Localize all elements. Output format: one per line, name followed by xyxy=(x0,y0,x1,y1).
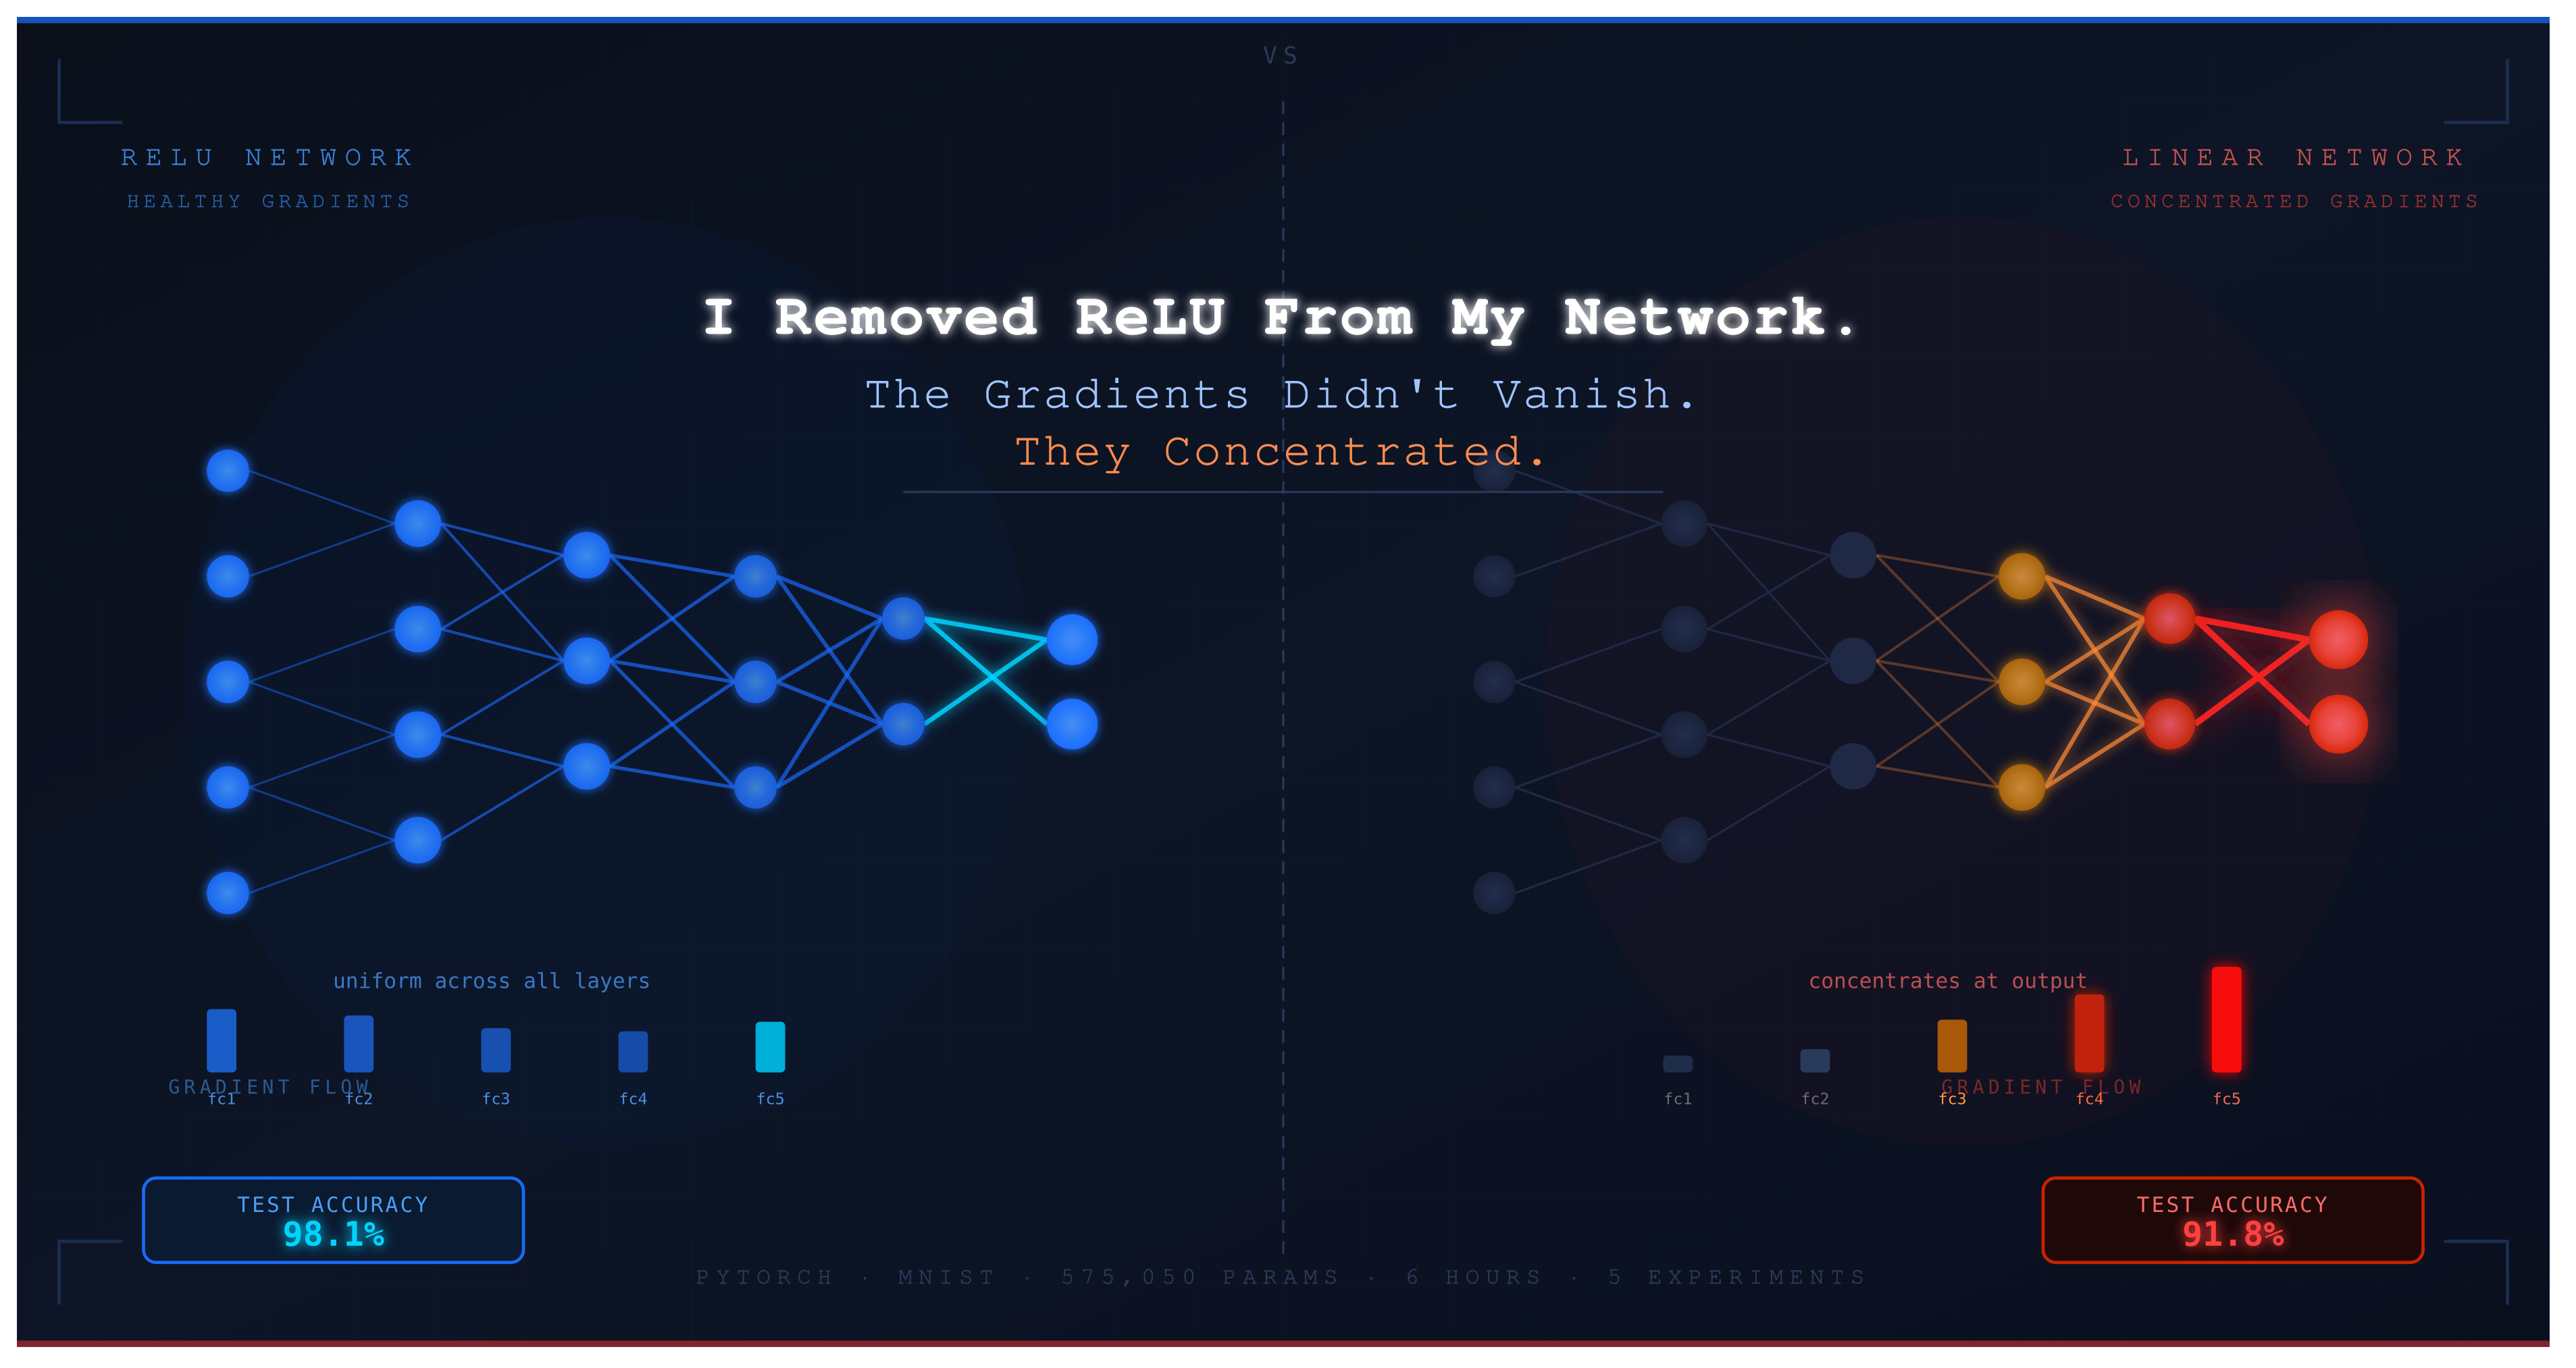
subtitle line 2: They Concentrated. xyxy=(1014,427,1553,474)
bar labels xyxy=(1664,1089,2241,1108)
panel: Linear network diagram xyxy=(1473,450,2368,914)
left background ellipse xyxy=(186,218,1030,1146)
title divider xyxy=(904,491,1663,492)
nodes: layer 3 xyxy=(563,532,610,790)
section label: GRADIENT FLOW xyxy=(1941,1076,2145,1098)
edges: layer 2 to 3 dim xyxy=(1707,524,1830,840)
nodes: layer 1 xyxy=(207,450,249,914)
accuracy value: 98.1% xyxy=(282,1215,384,1254)
nodes: layer 2 dim xyxy=(1661,501,1707,863)
bar labels: fc3 xyxy=(1938,1089,1967,1108)
heading: ReLU network: RELU NETWORK xyxy=(121,144,419,171)
bar chart xyxy=(207,1009,785,1073)
subtitle line 1: The Gradients Didn't Vanish. xyxy=(864,370,1703,417)
bottom accent bar xyxy=(17,1340,2550,1347)
nodes: layer 2 xyxy=(394,501,441,863)
footer metadata: PYTORCH · MNIST · 575,050 PARAMS · 6 HOURS · 5 EXPERIMENTS xyxy=(696,1265,1871,1288)
subheading: concentrated gradients: CONCENTRATED GRADIENTS xyxy=(2111,191,2482,211)
corner bracket top left xyxy=(59,59,122,122)
chart caption: concentrates at output xyxy=(1808,969,2088,993)
VS label: VS xyxy=(1263,43,1304,70)
title: I Removed ReLU From My Network. xyxy=(701,286,1865,346)
nodes: layer 3 dim xyxy=(1830,532,1876,790)
corner bracket bottom left xyxy=(59,1242,122,1304)
bar labels: fc1 xyxy=(1664,1089,1693,1108)
bar labels: fc5 xyxy=(756,1089,785,1108)
edges: layer 4 to 5 orange xyxy=(2045,576,2144,788)
nodes: layer 6 xyxy=(1047,614,1098,749)
nodes: layer 4 orange xyxy=(1999,553,2045,811)
corner bracket top right xyxy=(2444,59,2507,122)
bar labels: fc5 xyxy=(2213,1089,2241,1108)
panel: ReLU network diagram xyxy=(207,450,1098,914)
right background ellipse xyxy=(1545,218,2381,1146)
bar labels: fc2 xyxy=(1801,1089,1830,1108)
corner bracket bottom right xyxy=(2444,1242,2507,1304)
panel: left gradient flow chart xyxy=(168,969,785,1108)
nodes: layer 6 bright red xyxy=(2309,610,2368,754)
edges: layer 1 to 2 dim xyxy=(1516,471,1661,893)
edges: layer 5 to 6 red xyxy=(2195,619,2309,724)
callout: ReLU accuracy xyxy=(143,1178,523,1263)
nodes: layer 5 red xyxy=(2144,593,2195,749)
edges: layer 1 to 2 xyxy=(249,471,394,893)
center dashed divider xyxy=(1283,101,1284,1254)
subheading: healthy gradients: HEALTHY GRADIENTS xyxy=(127,191,413,211)
nodes: layer 1 dim xyxy=(1473,450,1516,914)
bar labels: fc4 xyxy=(2076,1089,2104,1108)
chart caption: uniform across all layers xyxy=(333,969,650,993)
bar labels: fc2 xyxy=(344,1089,373,1108)
edges: layer 4 to 5 xyxy=(777,576,882,788)
bar labels: fc4 xyxy=(619,1089,648,1108)
edges: layer 2 to 3 xyxy=(441,524,563,840)
panel: right gradient flow chart xyxy=(1663,967,2242,1108)
nodes: layer 5 xyxy=(882,597,925,745)
accuracy label: TEST ACCURACY xyxy=(237,1193,430,1217)
callout: Linear accuracy xyxy=(2043,1178,2423,1263)
accuracy value: 91.8% xyxy=(2182,1215,2284,1254)
accuracy label: TEST ACCURACY xyxy=(2137,1193,2329,1217)
bar labels: fc3 xyxy=(482,1089,511,1108)
edges: layer 3 to 4 xyxy=(610,555,735,788)
heading: Linear network: LINEAR NETWORK xyxy=(2122,144,2471,171)
bar labels xyxy=(207,1089,785,1108)
bar chart xyxy=(1663,967,2242,1073)
bar labels: fc1 xyxy=(207,1089,236,1108)
section label: GRADIENT FLOW xyxy=(168,1076,372,1098)
top accent bar xyxy=(17,17,2550,23)
nodes: layer 4 xyxy=(735,555,777,809)
edges: layer 3 to 4 brown xyxy=(1876,555,1999,788)
edges: layer 5 to 6 cyan xyxy=(925,619,1047,724)
